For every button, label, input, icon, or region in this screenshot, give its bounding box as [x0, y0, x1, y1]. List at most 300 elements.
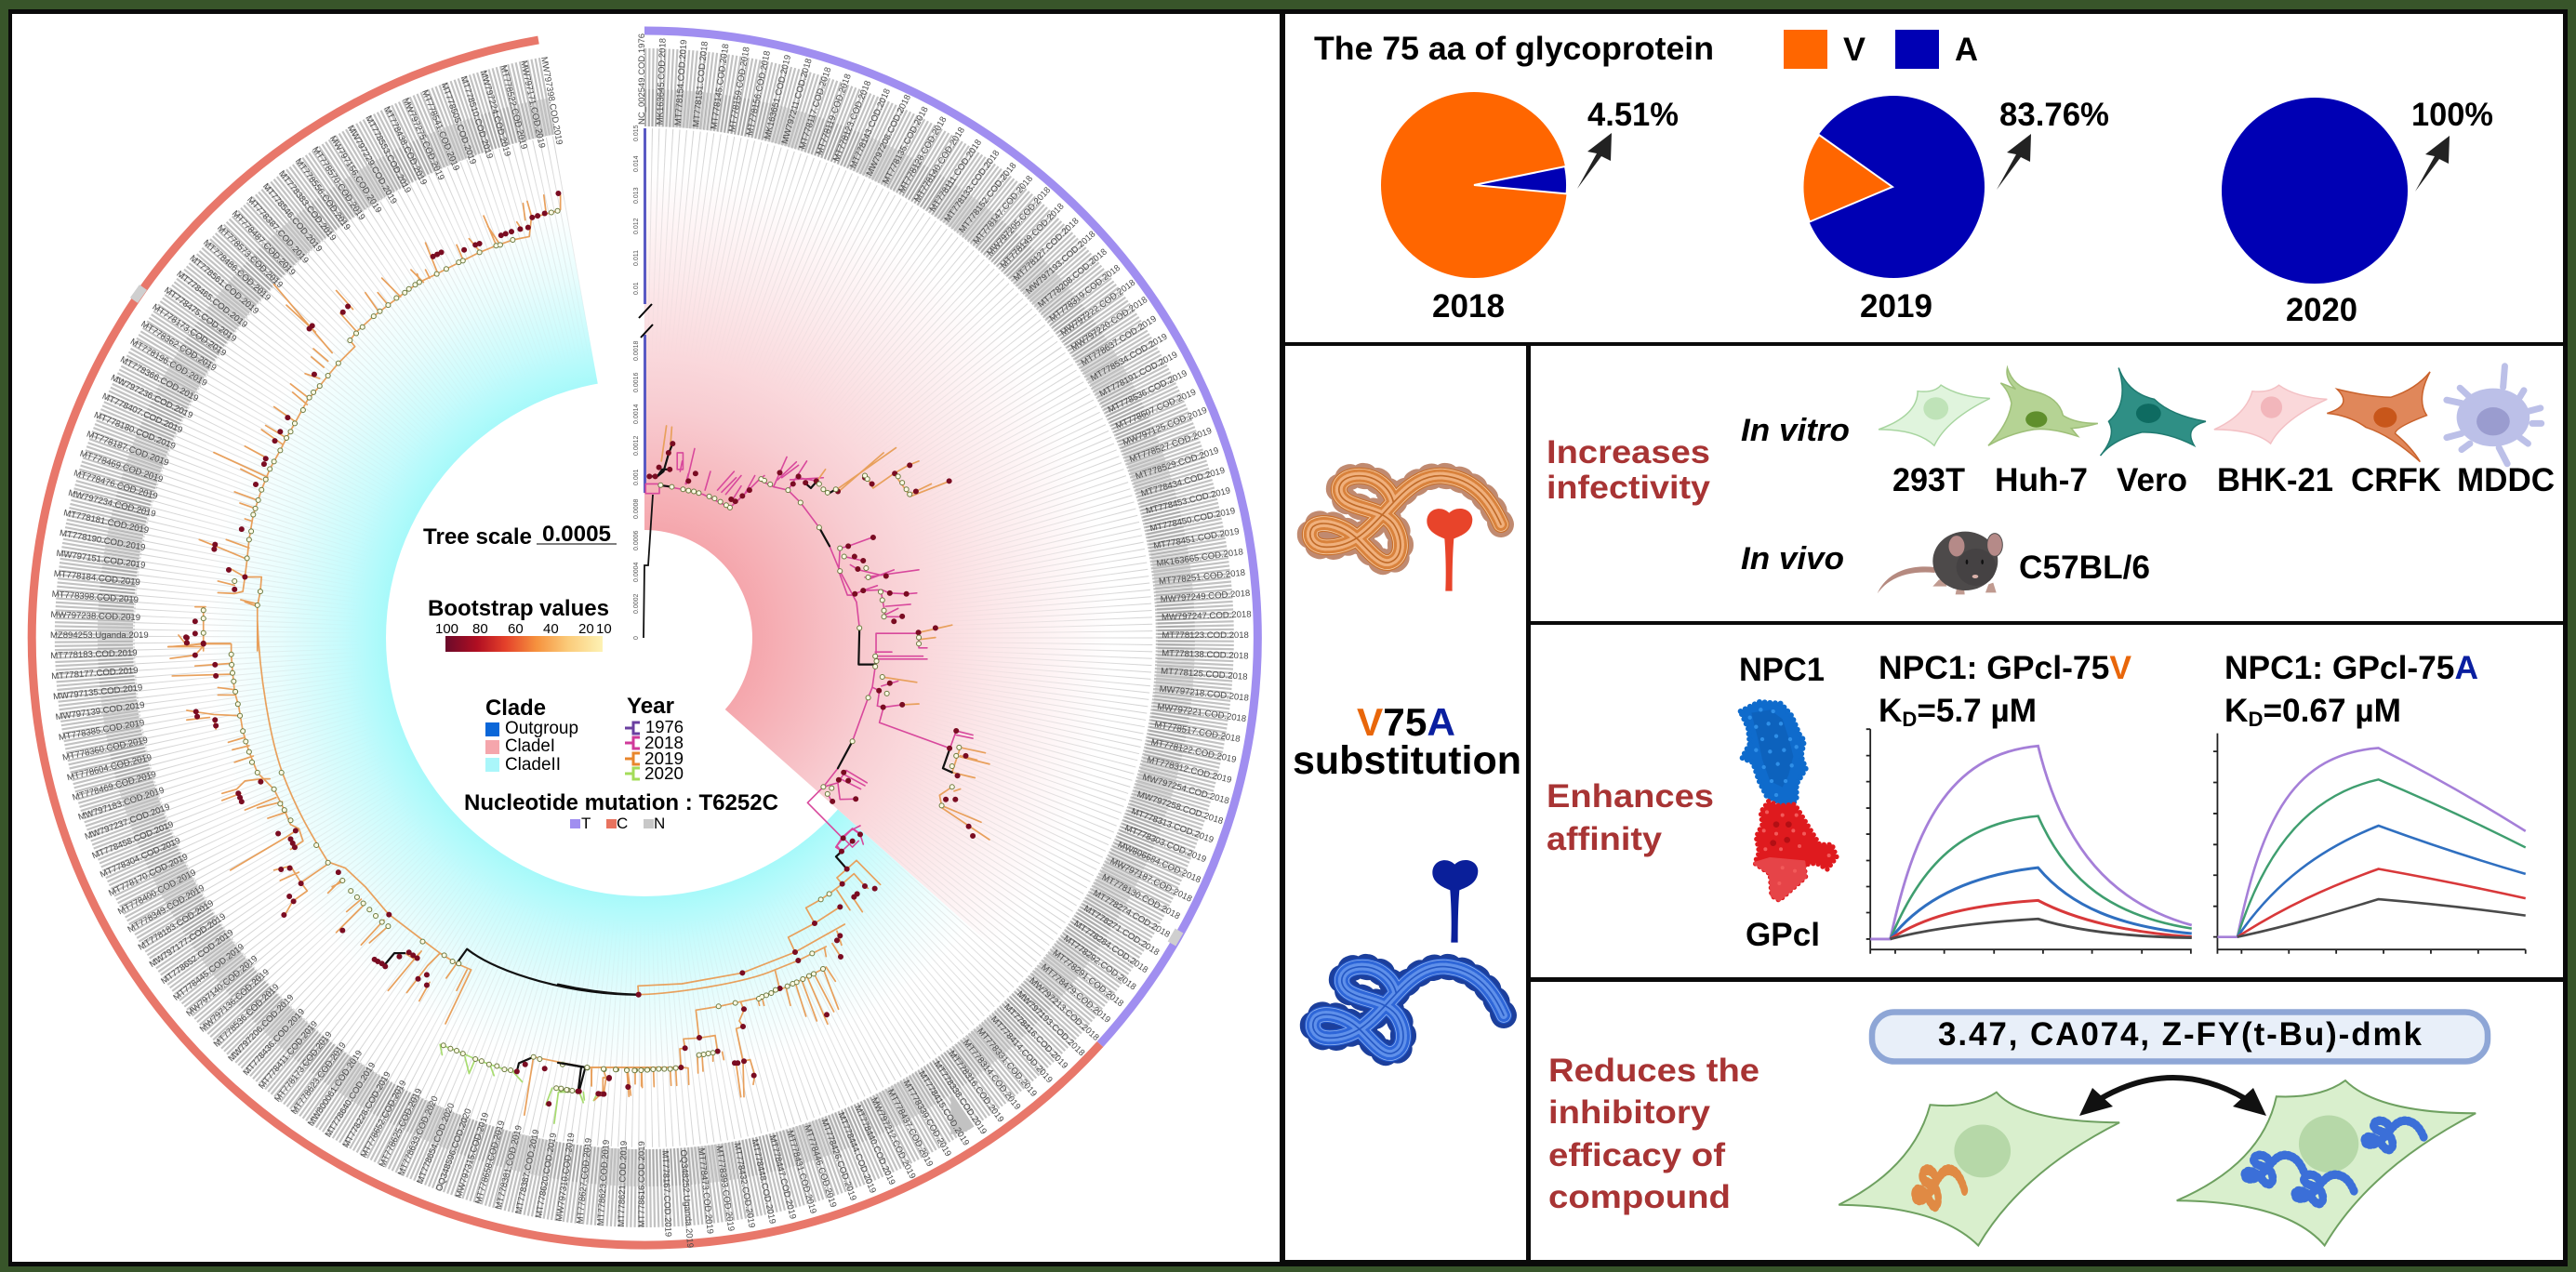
bootstrap legend: 20 — [578, 621, 594, 637]
tip labels: MW797229.COD.2019 — [345, 124, 399, 205]
tip labels: MT778414.COD.2019 — [989, 1014, 1055, 1085]
tip labels: MT778304.COD.2019 — [99, 836, 182, 881]
tip labels: MT778448.COD.2019 — [750, 1138, 777, 1225]
tip labels: MT778505.COD.2019 — [439, 82, 478, 166]
heading: compound — [1548, 1179, 1731, 1215]
cell line names: MDDC — [2457, 462, 2555, 498]
tree scale — [423, 522, 617, 550]
in vitro label: In vitro — [1741, 413, 1850, 448]
tip labels: MT778383.COD.2019 — [276, 168, 338, 243]
scale axis ticks: 0.0012 — [633, 435, 640, 456]
tip labels: MT778228.COD.2019 — [341, 1070, 393, 1150]
tip labels: MT778381.COD.2019 — [494, 1124, 524, 1211]
tip labels: MW797275.COD.2019 — [400, 97, 446, 182]
tip labels: MT778291.COD.2018 — [1051, 948, 1125, 1009]
tip labels: MT778385.COD.2019 — [58, 718, 145, 743]
cell line names: Vero — [2117, 462, 2187, 498]
nucleotide mutation legend: T — [581, 815, 591, 832]
tip labels: MT778431.COD.2019 — [784, 1129, 818, 1215]
tip labels: MT778517.COD.2018 — [1153, 720, 1241, 745]
tip labels: MT778620.COD.2019 — [534, 1133, 559, 1219]
tip labels: MT778411.COD.2019 — [257, 1019, 320, 1092]
tip labels: MT778510.COD.2019 — [458, 75, 495, 160]
tip labels: MT778437.COD.2019 — [885, 1088, 935, 1169]
tree: clade II upper branches — [168, 193, 561, 651]
tip labels: MT778338.COD.2019 — [932, 1059, 989, 1136]
tip labels: MT778154.COD.2019 — [673, 39, 689, 126]
tip labels: MW797212.COD.2019 — [869, 1096, 918, 1181]
pie 2019: 2019 — [1860, 288, 1932, 325]
panel: increases infectivity — [1531, 346, 2563, 621]
tip labels: MT778190.COD.2019 — [59, 528, 146, 553]
tip labels: MT778292.COD.2018 — [1061, 934, 1137, 992]
tip labels: MT778125.COD.2018 — [1161, 667, 1248, 682]
tip labels: MT778130.COD.2018 — [1100, 872, 1182, 921]
clade legend: Outgroup — [505, 719, 578, 738]
scale axis ticks: 0.0004 — [633, 562, 640, 582]
tip labels: MT778546.COD.2019 — [260, 181, 324, 254]
chart title A: =0.67 µM — [2263, 693, 2401, 729]
tip labels: MW797234.COD.2019 — [67, 488, 157, 520]
icon: orange receptor — [1427, 509, 1472, 591]
tip labels: MT778140.COD.2018 — [912, 126, 967, 204]
tip labels: MT778652.COD.2019 — [159, 928, 235, 987]
tip labels: MT778553.COD.2019 — [363, 113, 413, 194]
tip labels: MT778393.COD.2019 — [713, 1146, 736, 1232]
tip labels: MT778479.COD.2019 — [1039, 962, 1112, 1026]
panel: V75A substitution — [1285, 346, 1526, 1260]
tip labels: MW797249.COD.2018 — [1161, 589, 1251, 604]
tip labels: MT778625.COD.2019 — [378, 1087, 425, 1169]
tip labels: MW797213.COD.2018 — [1027, 975, 1101, 1043]
tip labels: MT778319.COD.2018 — [1048, 263, 1122, 325]
tip labels: MT778621.COD.2019 — [617, 1141, 630, 1227]
scale axis ticks: 0.0006 — [633, 530, 640, 550]
panel: phylogenetic tree — [12, 14, 1280, 1262]
scale axis ticks: 0.001 — [633, 469, 640, 485]
pie 2018: 4.51% — [1587, 97, 1679, 133]
label NPC1: NPC1 — [1739, 652, 1825, 688]
tip labels: MK163665.COD.2018 — [1156, 547, 1244, 569]
tip labels: MT778303.COD.2019 — [1123, 823, 1208, 865]
tip labels: MT778415.COD.2019 — [916, 1069, 971, 1147]
text: V75A substitution: substitution — [1293, 738, 1521, 783]
chart title V: K — [1879, 693, 1902, 729]
tip labels: MT778434.COD.2019 — [1140, 466, 1227, 499]
clade legend: CladeII — [505, 755, 561, 775]
pie 2020: 100% — [2411, 97, 2493, 133]
text: V75A substitution — [1293, 700, 1521, 783]
tip labels: MW797125.COD.2019 — [1122, 405, 1209, 448]
tip labels: MT778183.COD.2019 — [50, 648, 138, 661]
tip labels: MT778465.COD.2019 — [175, 269, 249, 330]
tip labels: MT778331.COD.2019 — [975, 1027, 1039, 1099]
tip labels: MW797258.COD.2018 — [1135, 789, 1225, 827]
tip labels: OQ348596.COD.2020 — [434, 1107, 474, 1193]
tip labels: MT778633.COD.2020 — [396, 1094, 441, 1177]
scale axis ticks: 0.015 — [633, 125, 640, 141]
clade legend: CladeI — [505, 736, 555, 756]
in vivo label: In vivo — [1741, 541, 1844, 576]
pie 2020: 2020 — [2286, 292, 2357, 328]
tip labels: MW797254.COD.2018 — [1141, 772, 1230, 806]
heading: efficacy of — [1548, 1137, 1725, 1173]
panel: glycoprotein pies — [1285, 14, 2563, 342]
tip labels: MT778654.COD.2020 — [415, 1102, 457, 1186]
tip labels: MT778349.COD.2019 — [126, 883, 206, 935]
tip labels: MT778400.COD.2019 — [116, 868, 198, 917]
tip labels: MT778145.COD.2018 — [709, 43, 731, 130]
tip labels: MW797136.COD.2019 — [198, 967, 272, 1034]
panel: enhances affinity — [1531, 625, 2563, 977]
heading — [1547, 778, 1714, 857]
scale axis ticks — [633, 125, 640, 640]
bootstrap legend: 80 — [472, 621, 488, 637]
tip labels: MT778274.COD.2018 — [1091, 888, 1172, 940]
tip labels: MT778313.COD.2019 — [1130, 806, 1215, 845]
chart title V: D — [1902, 708, 1917, 731]
scale axis ticks: 0.0018 — [633, 340, 640, 361]
tip labels: MW797236.COD.2019 — [109, 373, 194, 421]
tip labels: MT778366.COD.2019 — [118, 354, 200, 404]
tip labels: MT778445.COD.2019 — [171, 942, 246, 1003]
bootstrap legend: Bootstrap values — [428, 596, 609, 621]
tip labels: MT778469.COD.2019 — [71, 770, 157, 803]
year legend: Year — [627, 694, 674, 719]
tip labels: MT778312.COD.2019 — [1146, 755, 1233, 786]
tip labels: MT778119.COD.2018 — [815, 73, 854, 156]
cell line names: BHK-21 — [2217, 462, 2333, 498]
tip labels: MW797208.COD.2018 — [865, 93, 913, 178]
tip labels: MW797310.COD.2019 — [554, 1133, 577, 1222]
tip labels: MT778450.COD.2019 — [1149, 506, 1236, 534]
tree: clade I branches — [645, 426, 989, 852]
nucleotide mutation legend — [464, 790, 778, 832]
tip labels: MT778167.COD.2019 — [659, 1150, 673, 1237]
tip labels: MW797177.COD.2019 — [148, 911, 228, 970]
tree: clade II lower-left branches — [168, 621, 651, 1123]
tip labels: MT778522.COD.2019 — [498, 64, 529, 151]
tip labels: MT778447.COD.2019 — [767, 1134, 798, 1220]
bootstrap legend: 60 — [508, 621, 524, 637]
bootstrap legend: 40 — [543, 621, 559, 637]
tip labels: MT778127.COD.2018 — [1012, 216, 1082, 284]
tip labels: MT778387.COD.2019 — [245, 195, 311, 266]
tip labels: MT778183.COD.2019 — [137, 898, 216, 953]
tip labels: MT778487.COD.2019 — [230, 208, 298, 278]
pie 2019 — [1802, 96, 2109, 325]
scale axis ticks: 0.0002 — [633, 593, 640, 614]
tip labels: MT778251.COD.2018 — [1159, 568, 1246, 587]
tip labels: MT778284.COD.2018 — [1072, 919, 1149, 975]
tip labels: MT778458.COD.2019 — [90, 819, 175, 861]
tip labels: MZ894253.Uganda.2019 — [50, 630, 149, 641]
tip labels: MT778475.COD.2019 — [162, 285, 238, 344]
tip labels: MT778436.COD.2019 — [241, 1007, 307, 1078]
tip labels: MT778440.COD.2019 — [853, 1104, 897, 1186]
tip labels: MT778432.COD.2019 — [732, 1142, 757, 1228]
text: V75A substitution: V75A — [1357, 700, 1455, 744]
tip labels: MT778446.COD.2019 — [802, 1124, 838, 1209]
tip labels: MT778556.COD.2019 — [293, 156, 352, 232]
mini orange virus — [1915, 1170, 1964, 1206]
tip labels: MT778184.COD.2019 — [53, 569, 140, 588]
tip labels: MW797206.COD.2019 — [226, 993, 296, 1064]
heading — [1547, 434, 1711, 506]
double arrow — [2079, 1078, 2266, 1116]
tip labels: MT778143.COD.2018 — [848, 87, 893, 170]
tip labels: MW797237.COD.2019 — [84, 802, 171, 842]
tip labels: MW797193.COD.2018 — [1015, 989, 1086, 1058]
tip labels: MT778149.COD.2018 — [999, 202, 1067, 271]
tip labels: MT778536.COD.2019 — [212, 982, 282, 1050]
root axis and break — [644, 128, 646, 493]
clade I wedge — [644, 128, 1152, 975]
tip labels: MT778486.COD.2019 — [201, 238, 272, 303]
tip labels: MT778177.COD.2019 — [51, 666, 139, 682]
tip labels: MW797171.COD.2019 — [518, 60, 547, 149]
tip labels: MT778444.COD.2019 — [836, 1111, 878, 1195]
tip labels: MT778156.COD.2018 — [745, 50, 773, 137]
tip labels: NC_002549.COD.1976 — [637, 33, 647, 125]
tip labels: MT778623.COD.2019 — [289, 1040, 349, 1117]
tip labels: MW806684.COD.2018 — [1116, 840, 1202, 885]
mini blue viruses — [2245, 1120, 2423, 1204]
tip labels: MT778541.COD.2019 — [419, 88, 461, 172]
tip labels: MT778604.COD.2019 — [66, 752, 153, 783]
tip labels: MT778180.COD.2019 — [92, 410, 177, 452]
tip labels: MT778640.COD.2019 — [324, 1061, 378, 1139]
outer ring: nucleotide T — [644, 31, 1257, 1044]
tree: clade II lower-right branches — [558, 826, 881, 1100]
chart title V — [1879, 650, 2132, 731]
tip labels: MT778360.COD.2019 — [61, 735, 149, 763]
legend A: A — [1955, 32, 1978, 68]
tip labels: MT778123.COD.2018 — [1162, 630, 1249, 641]
nucleotide mutation legend: N — [654, 815, 665, 832]
scale axis ticks: 0.01 — [633, 282, 640, 295]
tip labels: MT778527.COD.2019 — [1128, 426, 1214, 465]
compound pill: 3.47, CA074, Z-FY(t-Bu)-dmk — [1938, 1016, 2423, 1053]
scale axis ticks: 0.013 — [633, 187, 640, 204]
tip labels: MT778135.COD.2018 — [881, 105, 931, 186]
tip labels: MT778152.COD.2018 — [957, 161, 1018, 235]
cell right — [2177, 1080, 2476, 1246]
tip labels: MW797205.COD.2018 — [985, 185, 1053, 258]
tip labels: MW797193.COD.2018 — [1024, 230, 1097, 297]
tip labels: MT778473.COD.2019 — [696, 1147, 715, 1235]
tip labels: MT778123.COD.2018 — [831, 79, 873, 163]
tip labels: MW797247.COD.2018 — [1162, 609, 1252, 623]
tip labels: MT778181.COD.2019 — [62, 508, 150, 536]
tip labels: MT778637.COD.2019 — [1080, 314, 1159, 368]
tip labels: OQ348252.Uganda.2019 — [678, 1149, 695, 1249]
tip labels: MW797139.COD.2019 — [55, 700, 145, 722]
pie 2018: 2018 — [1432, 288, 1505, 325]
tip labels: MT778469.COD.2019 — [78, 449, 165, 485]
tip labels: MT778159.COD.2018 — [727, 46, 752, 133]
tip labels: MW797315.COD.2019 — [454, 1111, 491, 1199]
tip labels: MW797187.COD.2018 — [1109, 856, 1193, 905]
tip labels: MW797151.COD.2019 — [56, 549, 146, 571]
tip labels: MT778133.COD.2018 — [943, 149, 1002, 224]
pie 2020 — [2222, 97, 2493, 328]
tip labels: MT778627.COD.2019 — [575, 1137, 594, 1225]
tip labels: MT778271.COD.2018 — [1082, 904, 1161, 958]
scale axis ticks: 0.0008 — [633, 498, 640, 519]
year legend: 2020 — [644, 764, 684, 783]
year legend: 2019 — [644, 749, 684, 768]
tip labels: MT778416.COD.2019 — [1002, 1002, 1069, 1071]
tip labels: MT778339.COD.2019 — [901, 1079, 953, 1159]
bootstrap legend: 10 — [596, 621, 612, 637]
cell line names: CRFK — [2351, 462, 2441, 498]
tip labels: MT778451.COD.2019 — [1153, 526, 1241, 551]
tip labels: MW797224.COD.2019 — [478, 69, 512, 158]
tip labels: MT778117.COD.2018 — [797, 66, 833, 151]
tip labels: MT778173.COD.2019 — [272, 1030, 334, 1104]
tip labels: MW797140.COD.2019 — [184, 954, 259, 1019]
cell icons — [1879, 366, 2542, 464]
tip labels: MT778208.COD.2018 — [1036, 246, 1109, 310]
chart title A: NPC1: GPcl-75A — [2224, 650, 2478, 686]
outer ring: nucleotide N marks — [134, 287, 1179, 944]
bootstrap legend: 100 — [435, 621, 458, 637]
tip labels: MT778453.COD.2019 — [1145, 485, 1231, 516]
panel: reduces inhibitory efficacy — [1531, 982, 2563, 1260]
tip labels: MW797221.COD.2018 — [1157, 702, 1247, 724]
cell left — [1839, 1093, 2119, 1246]
tip labels: MT778187.COD.2019 — [85, 430, 170, 469]
tip labels: MW797211.COD.2018 — [780, 58, 815, 145]
tip labels: MT778191.COD.2019 — [1098, 350, 1179, 399]
sensorgram A — [2213, 734, 2526, 954]
tip labels: MT778658.COD.2019 — [473, 1120, 508, 1205]
compound pill — [1872, 1012, 2488, 1062]
tip labels: MT778476.COD.2019 — [73, 469, 159, 502]
legend V: V — [1843, 32, 1866, 68]
tree scale: 0.0005 — [542, 522, 611, 547]
heading: Increases — [1547, 434, 1710, 470]
tip labels: MW800061.COD.2019 — [306, 1049, 365, 1128]
outer ring: nucleotide C — [32, 40, 1100, 1245]
chart title A — [2224, 650, 2478, 731]
heading: inhibitory — [1548, 1094, 1711, 1131]
heading: Enhances — [1547, 778, 1714, 815]
clade legend: Clade — [485, 696, 546, 721]
cell line names — [1892, 462, 2555, 498]
icon: orange virus — [1310, 476, 1501, 563]
scale axis ticks: 0.0016 — [633, 372, 640, 392]
cell line names: 293T — [1892, 462, 1965, 498]
tip labels: MT778438.COD.2019 — [381, 105, 429, 187]
icon: blue receptor — [1432, 860, 1478, 943]
tip labels: MT778561.COD.2019 — [188, 253, 260, 316]
tip labels: MT778573.COD.2019 — [215, 223, 285, 290]
year legend — [625, 694, 684, 783]
scale axis ticks: 0.011 — [633, 250, 640, 266]
tip labels: MK163651.COD.2019 — [763, 54, 793, 140]
tip labels: MT778607.COD.2019 — [1114, 387, 1198, 431]
tip labels: MT778616.COD.2019 — [637, 1141, 647, 1227]
tip labels: MT778426.COD.2019 — [818, 1118, 858, 1202]
tip labels: MW797398.COD.2019 — [538, 56, 564, 146]
tip labels: MT778314.COD.2019 — [961, 1038, 1022, 1112]
tip labels: MW797218.COD.2018 — [1159, 684, 1249, 704]
scale axis ticks: 0.0014 — [633, 404, 640, 424]
label GPcl: GPcl — [1746, 917, 1820, 953]
label C57BL/6: C57BL/6 — [2019, 550, 2150, 586]
tip labels: MT778652.COD.2019 — [359, 1079, 409, 1159]
tip labels: MT778398.COD.2019 — [51, 590, 139, 605]
tip labels: MT778407.COD.2019 — [100, 391, 184, 436]
tip labels: MW797156.COD.2019 — [327, 134, 383, 215]
pie 2018 — [1381, 92, 1679, 325]
pie 2019: 83.76% — [1999, 97, 2109, 133]
tip labels: MT778122.COD.2019 — [1150, 737, 1237, 765]
scale axis ticks: 0.012 — [633, 218, 640, 234]
tip labels: MT778128.COD.2018 — [896, 115, 949, 194]
tip labels: MW797220.COD.2018 — [1069, 295, 1149, 353]
year legend: 2018 — [644, 734, 684, 752]
heading: affinity — [1547, 821, 1663, 857]
tip labels: MT778111.COD.2018 — [927, 138, 984, 214]
tip labels — [50, 33, 1252, 1249]
clade legend — [485, 696, 578, 775]
tip labels: MT778170.COD.2019 — [107, 852, 190, 899]
protein structure — [1741, 702, 1837, 900]
tip labels: MT778196.COD.2019 — [128, 337, 209, 389]
cell line names: Huh-7 — [1995, 462, 2088, 498]
tip labels: MT778362.COD.2019 — [139, 319, 219, 374]
legend V — [1784, 30, 1866, 69]
tip labels: MT778623.COD.2019 — [595, 1139, 612, 1226]
legend A — [1895, 30, 1978, 69]
tip labels: MT778147.COD.2018 — [972, 174, 1035, 246]
chart title A: K — [2224, 693, 2248, 729]
clade II wedge — [133, 137, 1025, 1147]
tip labels: MW797183.COD.2019 — [77, 786, 166, 823]
tip labels: MT778536.COD.2019 — [1107, 368, 1188, 416]
nucleotide mutation legend: Nucleotide mutation : T6252C — [464, 790, 778, 815]
chart title V: NPC1: GPcl-75V — [1879, 650, 2132, 686]
bootstrap legend — [428, 596, 612, 652]
year legend: 1976 — [645, 718, 684, 736]
icon: mouse — [1878, 532, 2002, 594]
nucleotide mutation legend: C — [617, 815, 628, 832]
tip labels: MT778151.COD.2018 — [691, 41, 710, 127]
chart title V: =5.7 µM — [1917, 693, 2037, 729]
scale axis ticks: 0.014 — [633, 155, 640, 172]
tip labels: MT778534.COD.2019 — [1089, 332, 1169, 384]
heading: Reduces the — [1548, 1053, 1759, 1089]
tip labels: MT778316.COD.2019 — [947, 1049, 1005, 1124]
tip labels: MW797135.COD.2019 — [53, 682, 143, 702]
icon: blue virus — [1313, 967, 1504, 1053]
scale axis ticks: 0 — [633, 636, 640, 640]
tip labels: MT778138.COD.2018 — [1162, 648, 1249, 661]
tip labels: MT778173.COD.2019 — [151, 302, 228, 359]
heading: infectivity — [1547, 470, 1711, 506]
chart title A: D — [2248, 708, 2263, 731]
tip labels: MT778529.COD.2019 — [1135, 445, 1220, 482]
tip labels: MT778570.COD.2019 — [310, 145, 367, 222]
heading — [1548, 1053, 1759, 1215]
tip labels: MK163645.COD.2018 — [655, 38, 669, 125]
sensorgram V — [1866, 729, 2192, 954]
tip labels: MW797238.COD.2019 — [50, 610, 140, 623]
heading: The 75 aa of glycoprotein — [1314, 31, 1714, 67]
